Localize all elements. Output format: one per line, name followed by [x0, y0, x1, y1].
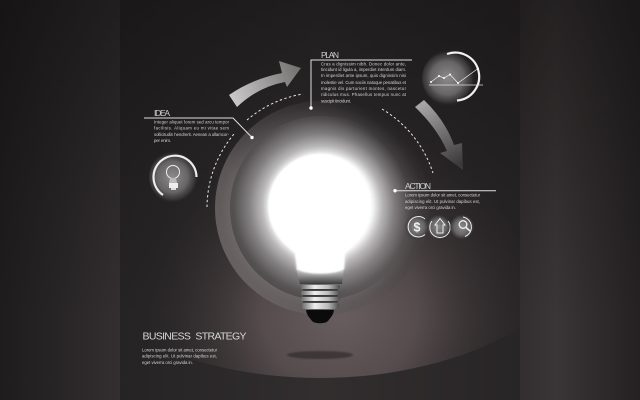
heading: idea: IDEA: [154, 108, 170, 118]
text: plan body: suscipit tincidunt.: [321, 98, 351, 104]
text: action body: [405, 192, 481, 210]
plan section: [309, 50, 412, 110]
screw base: [296, 268, 344, 309]
bulb: [268, 154, 372, 323]
leader line: [311, 60, 412, 108]
glass: [268, 154, 372, 274]
text: idea body: per enim.: [154, 138, 171, 143]
icon: magnifier: [450, 214, 476, 240]
idea section: [144, 108, 254, 143]
text: idea body: facilisis. Aliquam eu mi vitae sem: [154, 126, 229, 130]
text: action body: eget viverra orci gravida in.: [405, 205, 456, 210]
text: plan body: [321, 62, 407, 104]
icon: light bulb: [149, 151, 201, 203]
icon: up arrow: [427, 214, 453, 240]
text: strategy body: [142, 348, 218, 365]
text: plan body: magnis dis parturient montes, nascetur: [321, 86, 407, 91]
icon: dollar: [405, 214, 431, 240]
glass halo: [268, 154, 372, 274]
icon: line chart: [422, 50, 483, 106]
arrow: plan to action: [415, 100, 463, 170]
text: plan body: In imperdiet ante ipsum, quis dignissim nisi: [321, 73, 406, 78]
text: idea body: [154, 120, 230, 143]
arrow: idea to plan: [229, 61, 301, 107]
action section: [393, 181, 496, 210]
dashed orbit: [207, 94, 433, 207]
title: business strategy: BUSINESS STRATEGY: [142, 330, 246, 342]
inner disc: [230, 116, 414, 300]
text: plan body: molestie vel. Cum sociis natoque penatibus et: [321, 80, 407, 85]
heading: action: ACTION: [405, 181, 431, 191]
leader line: [144, 118, 252, 138]
crescent ring: [215, 101, 429, 315]
text: action body: adipiscing elit. Ut pulvinar dapibus est,: [405, 199, 480, 204]
heading: plan: PLAN: [321, 50, 339, 60]
tip: [306, 310, 334, 323]
text: strategy body: adipiscing elit. Ut pulvinar dapibus est,: [142, 354, 217, 358]
text: plan body: Cras a dignissim nibh. Donec dolor ante,: [321, 62, 406, 66]
text: strategy body: Lorem ipsum dolor sit amet, consectetur: [142, 348, 218, 352]
glow halo behind bulb: [212, 96, 432, 316]
icon: dollar: $: [414, 220, 421, 234]
text: plan body: tincidunt id ligula a, imperdiet interdum diam.: [321, 67, 406, 72]
text: strategy body: eget viverra orci gravida in.: [142, 360, 193, 365]
floor shadow: [287, 351, 353, 359]
text: idea body: sollicitudin hendrerit. Aenean a ullamcor-: [154, 132, 230, 137]
leader line: [395, 190, 496, 192]
text: action body: Lorem ipsum dolor sit amet, consectetur: [405, 192, 481, 198]
text: plan body: ridiculus mus. Phasellus tempus nunc at: [321, 92, 407, 97]
text: idea body: Integer aliquet lorem sed arcu tempor: [154, 120, 230, 124]
